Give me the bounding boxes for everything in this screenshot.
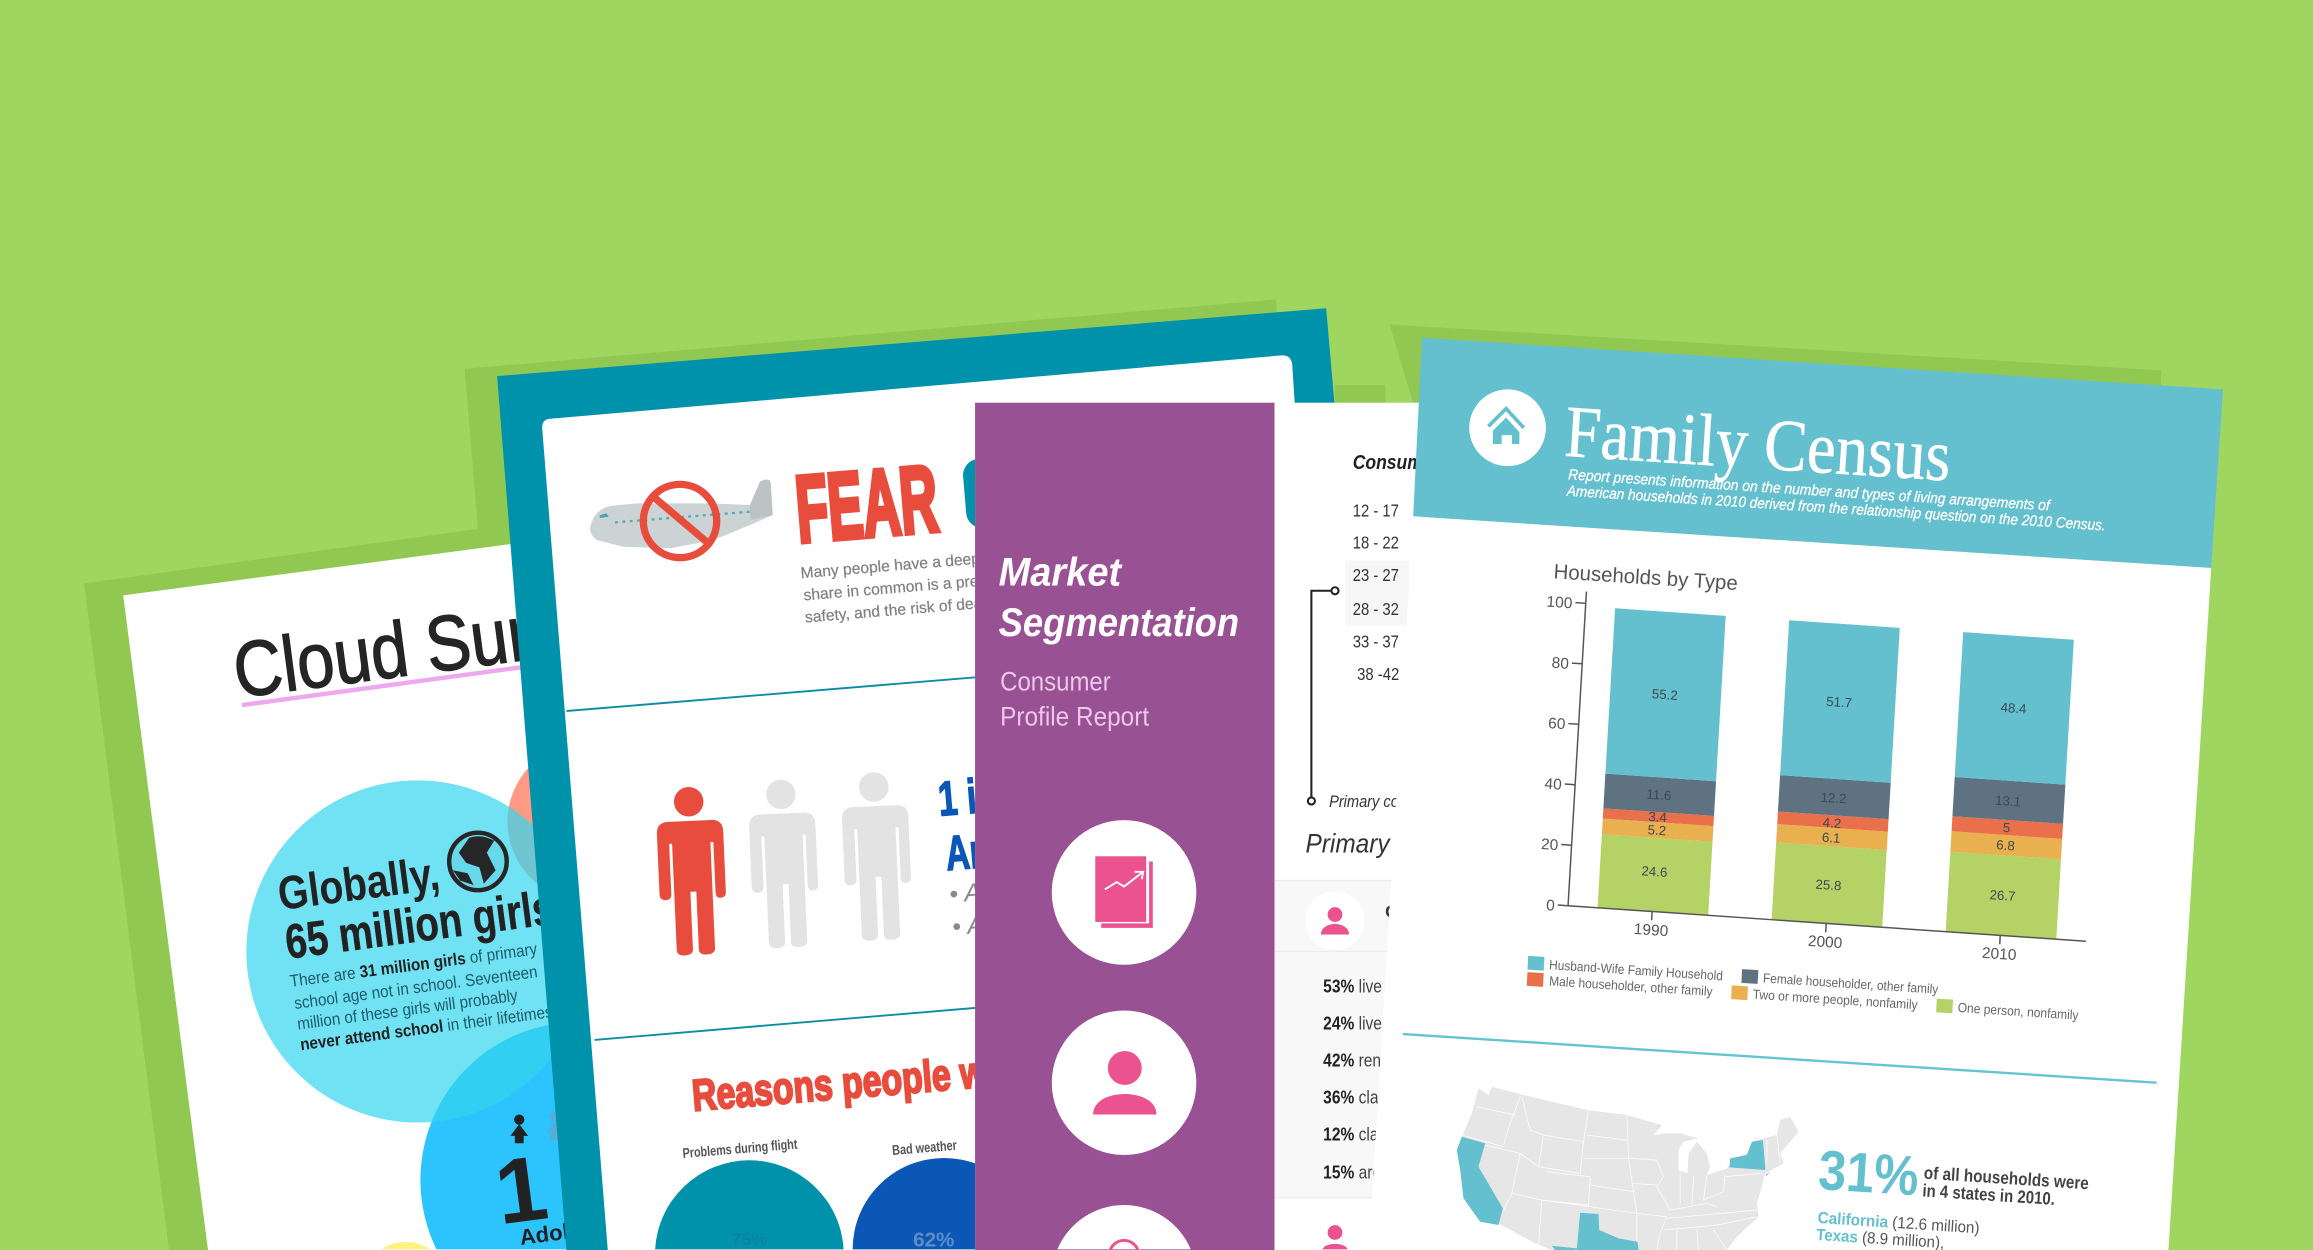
big number 1: 1 xyxy=(489,1136,553,1244)
heading: reasons: Reasons people w xyxy=(690,1048,989,1121)
stat caption: in 4 states in 2010. xyxy=(1922,1180,2056,1209)
x axis labels xyxy=(1633,921,2017,964)
subheading: Consumer xyxy=(1000,666,1111,696)
stat: 31%: 31% xyxy=(1817,1138,1921,1207)
heading: Market Segmentation: Segmentation xyxy=(999,601,1239,645)
icon: house xyxy=(1469,389,1546,466)
icon: person xyxy=(1052,1010,1196,1155)
age list: 12 - 17 xyxy=(1353,501,1399,521)
age list xyxy=(1353,501,1399,684)
icon: red person xyxy=(655,786,729,956)
heading: Cloud Survey: Cloud Sur xyxy=(228,588,535,715)
text block: Globally: school age not in school. Seventeen xyxy=(293,962,539,1013)
heading: consumer: Consumer xyxy=(1353,452,1441,474)
heading badge xyxy=(962,453,1056,529)
text block: intro xyxy=(800,550,996,626)
stats list: 42% rent a xyxy=(1323,1050,1399,1071)
icon: globe xyxy=(449,833,507,890)
bar values: 6.8 xyxy=(1996,837,2015,853)
icon: girl xyxy=(510,1114,528,1143)
stats list xyxy=(1323,977,1399,1183)
text block: 1 in 3: 1 in xyxy=(936,768,999,827)
stat caption xyxy=(1922,1163,2090,1209)
stats list: 12% class xyxy=(1323,1124,1394,1145)
bar values: 12.2 xyxy=(1820,790,1847,806)
legend: Husband-Wife Family Household xyxy=(1549,957,1723,983)
text block: Globally: Globally, xyxy=(275,847,443,921)
subheading: Profile Report xyxy=(1000,702,1150,732)
icon: small person xyxy=(1305,891,1364,950)
card shadows xyxy=(84,299,2161,1250)
age list: 38 -42 xyxy=(1357,665,1399,684)
bar values: 25.8 xyxy=(1815,877,1842,893)
heading underline xyxy=(242,667,525,705)
label: Adolescent: Adol xyxy=(518,1219,570,1250)
subtitle: Report presents information on the number and types of living arrangements of xyxy=(1568,466,2052,515)
icon: small person xyxy=(1305,1207,1364,1249)
text block: Globally: never attend school in their lifetimes xyxy=(299,1002,554,1054)
row separators xyxy=(1275,881,1422,1198)
stat caption: of all households were xyxy=(1923,1163,2090,1193)
bar values xyxy=(1641,676,2027,905)
y axis labels: 0 xyxy=(1546,897,1556,915)
divider xyxy=(566,673,1033,711)
bullet list xyxy=(948,878,985,941)
grey list background xyxy=(1275,881,1422,1198)
x axis labels: 1990 xyxy=(1633,921,1669,940)
stats list: 24% live in xyxy=(1323,1013,1398,1034)
legend: Male householder, other family xyxy=(1549,973,1713,999)
icon: report xyxy=(1052,820,1196,965)
heading: Market Segmentation: Market xyxy=(999,551,1123,595)
bullet list: • A xyxy=(948,878,982,909)
heading: Market Segmentation xyxy=(999,551,1239,645)
connector xyxy=(1308,587,1339,805)
bar values: 26.7 xyxy=(1989,887,2016,904)
header band xyxy=(1413,338,2223,568)
text block: Globally xyxy=(275,847,557,1054)
age list: 33 - 37 xyxy=(1353,632,1399,652)
bar values: 6.1 xyxy=(1822,830,1841,846)
age list: 28 - 32 xyxy=(1353,600,1399,619)
cyan circle xyxy=(246,780,589,1123)
highlight xyxy=(1345,561,1409,625)
circle label: Bad weather xyxy=(891,1137,958,1158)
y axis labels: 80 xyxy=(1551,655,1570,673)
bar chart xyxy=(1527,589,2104,969)
salmon circle xyxy=(507,742,667,901)
map: united states xyxy=(1457,1087,1799,1250)
bar values: 51.7 xyxy=(1826,694,1853,710)
chart title: Households by Type xyxy=(1553,560,1738,595)
y axis labels: 20 xyxy=(1541,836,1559,854)
bar values: 5 xyxy=(2002,820,2011,835)
purple sidebar xyxy=(975,403,1275,1250)
blue stat circle xyxy=(853,1158,1036,1249)
state list: California (12.6 million) xyxy=(1817,1209,1980,1237)
bar 2010 xyxy=(1946,632,2074,939)
subtitle: American households in 2010 derived from the relationship question on the 2010 Census. xyxy=(1565,483,2106,534)
legend xyxy=(1527,956,2079,1023)
subheading xyxy=(1000,666,1150,732)
icon: crossed plane xyxy=(590,480,773,558)
legend: Female householder, other family xyxy=(1763,970,1939,997)
panel: fear of flying xyxy=(497,308,1409,1250)
bar values: 5.2 xyxy=(1647,822,1667,838)
text block: Globally: There are 31 million girls of primary xyxy=(289,940,539,991)
panel: family census xyxy=(1369,338,2223,1250)
bar 1990 xyxy=(1598,608,1726,915)
divider xyxy=(594,1003,1033,1040)
row label: C xyxy=(1385,902,1398,922)
text block: Globally: 65 million girls xyxy=(282,881,557,970)
x axis labels: 2010 xyxy=(1981,945,2017,964)
icon: faded girl xyxy=(546,1111,564,1140)
stats list: 53% live in xyxy=(1323,977,1398,997)
bar values: 48.4 xyxy=(2000,700,2027,717)
panel: cloud survey xyxy=(123,541,736,1250)
age list: 23 - 27 xyxy=(1353,566,1399,586)
icon: grey person xyxy=(747,778,821,949)
panel: market segmentation xyxy=(975,403,1448,1250)
x axis labels: 2000 xyxy=(1807,933,1843,952)
icon: grey person xyxy=(840,771,914,942)
bar values: 11.6 xyxy=(1646,787,1672,803)
text block: 1 in 3 xyxy=(936,768,999,881)
bar values: 4.2 xyxy=(1822,815,1842,831)
y axis labels: 40 xyxy=(1544,776,1563,794)
state list xyxy=(1816,1209,1980,1250)
stats list: 15% are xyxy=(1323,1162,1381,1183)
text block: intro: share in common is a preoc xyxy=(803,572,996,604)
circle label: Problems during flight xyxy=(682,1136,798,1161)
title: Family Census xyxy=(1563,390,1954,497)
icon: person outline xyxy=(1057,1205,1191,1249)
legend: Two or more people, nonfamily xyxy=(1752,987,1918,1012)
axes xyxy=(1557,591,2104,950)
text block: intro: safety, and the risk of death xyxy=(804,594,996,626)
y axis labels xyxy=(1528,594,1573,915)
bar values: 13.1 xyxy=(1995,793,2021,809)
text block: 1 in 3: An xyxy=(944,824,992,881)
divider xyxy=(1403,1034,2157,1083)
yellow circle xyxy=(381,1242,430,1249)
bar values: 24.6 xyxy=(1641,863,1668,880)
stat value: 75% xyxy=(732,1229,767,1249)
teal stat circle xyxy=(655,1160,844,1249)
legend: One person, nonfamily xyxy=(1957,1000,2079,1023)
text block: Globally: million of these girls will probably xyxy=(296,986,520,1034)
bar values: 55.2 xyxy=(1651,686,1678,703)
y axis labels: 100 xyxy=(1546,594,1573,612)
bar values: 3.4 xyxy=(1648,809,1667,825)
text block: intro: Many people have a deeply xyxy=(800,550,992,582)
blue circle xyxy=(420,1022,736,1249)
heading: FEAR: FEAR xyxy=(792,447,942,563)
bar 2000 xyxy=(1772,620,1900,927)
bullet list: • A xyxy=(951,911,985,941)
age list: 18 - 22 xyxy=(1353,534,1399,553)
y axis labels: 60 xyxy=(1548,715,1566,733)
connector label: Primary consumer xyxy=(1329,793,1448,811)
stats list: 36% class xyxy=(1323,1087,1394,1108)
subheading: primary: Primary xyxy=(1305,830,1392,859)
